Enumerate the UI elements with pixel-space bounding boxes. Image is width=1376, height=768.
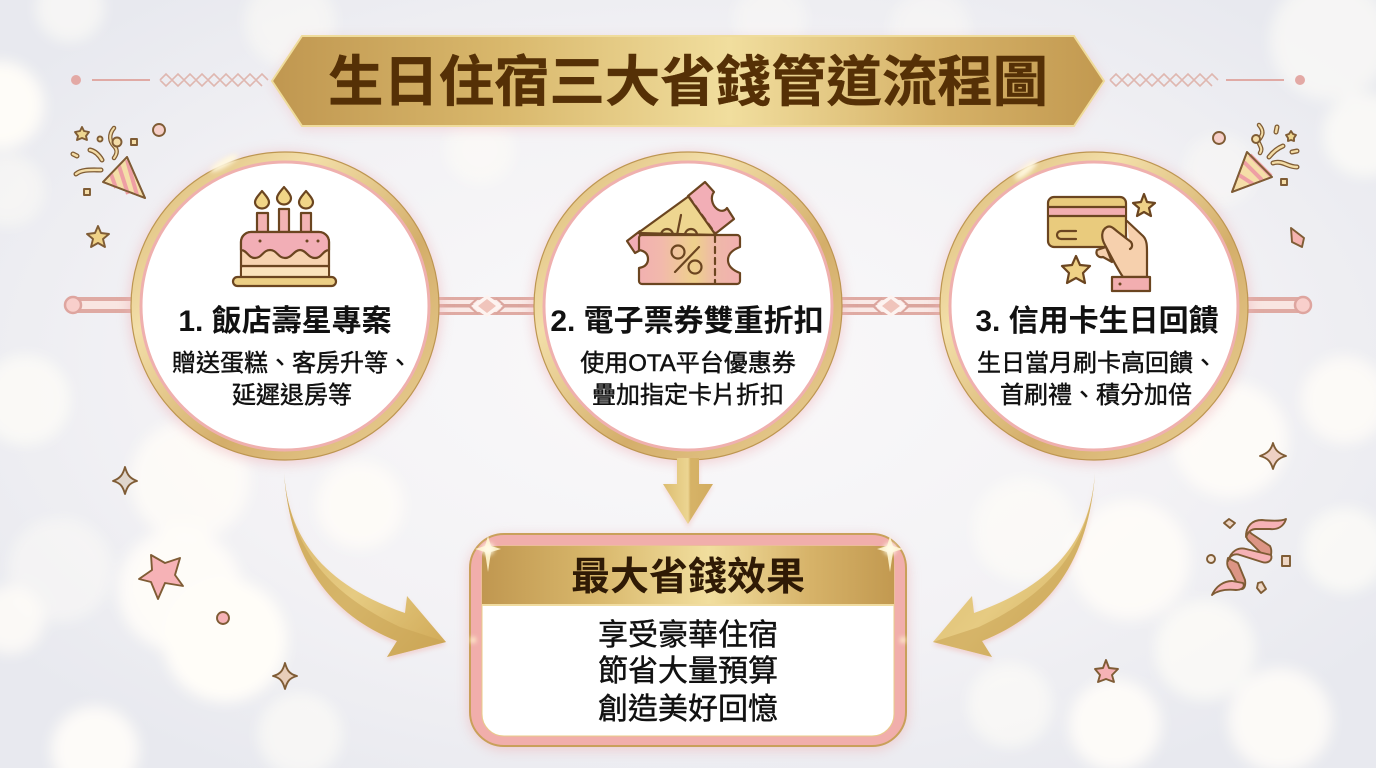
icon: sparkle right [1260,443,1286,469]
icon: birthday cake [233,187,336,286]
result list: 享受豪華住宿 [598,619,778,652]
step 2 heading: 2. 電子票券雙重折扣 [550,305,824,338]
icon: hand holding credit card [1048,194,1155,291]
panel: step 1 hotel birthday plan [129,152,441,464]
icon: party popper left [73,124,165,198]
panel: step 3 credit card rewards [938,152,1250,464]
result header band [482,546,894,606]
step 1 heading: 1. 飯店壽星專案 [178,305,392,338]
icon: small pink star right [1095,660,1118,682]
icon: ribbon confetti [1207,519,1290,595]
title banner [272,36,1104,129]
left top ornament [71,74,268,86]
icon: sparkle left upper [113,467,137,494]
connector 1 to 2 [436,295,538,317]
icon: pink star [139,555,183,599]
arrow: step 1 to result [284,473,446,660]
step 1 description: 延遲退房等 [232,382,352,409]
icon: pink dot [217,612,229,624]
right connector end [1246,297,1311,313]
result list: 節省大量預算 [598,655,778,688]
arrow: step 3 to result [933,473,1095,660]
result list: 創造美好回憶 [598,693,778,726]
icon: discount tickets [627,182,740,284]
icon: party popper right [1213,125,1297,192]
right top ornament [1110,74,1305,86]
step 2 description: 使用OTA平台優惠券 [580,350,796,377]
step 3 description: 首刷禮、積分加倍 [1000,382,1192,409]
icon: sparkle left lower [273,663,297,689]
panel: maximum savings result [468,534,908,750]
title text: 生日住宿三大省錢管道流程圖 [328,51,1048,113]
left connector end [65,297,132,313]
icon: small gold star left [87,226,109,247]
panel: step 2 e-voucher discount [532,152,844,464]
connector 2 to 3 [840,295,942,317]
step 1 description: 贈送蛋糕、客房升等、 [172,350,412,377]
result heading: 最大省錢效果 [571,556,805,599]
step 2 description: 疊加指定卡片折扣 [592,382,784,409]
icon: confetti piece right [1291,228,1304,247]
step 3 description: 生日當月刷卡高回饋、 [977,350,1217,377]
step 3 heading: 3. 信用卡生日回饋 [975,305,1219,338]
arrow: step 2 to result [663,458,713,528]
